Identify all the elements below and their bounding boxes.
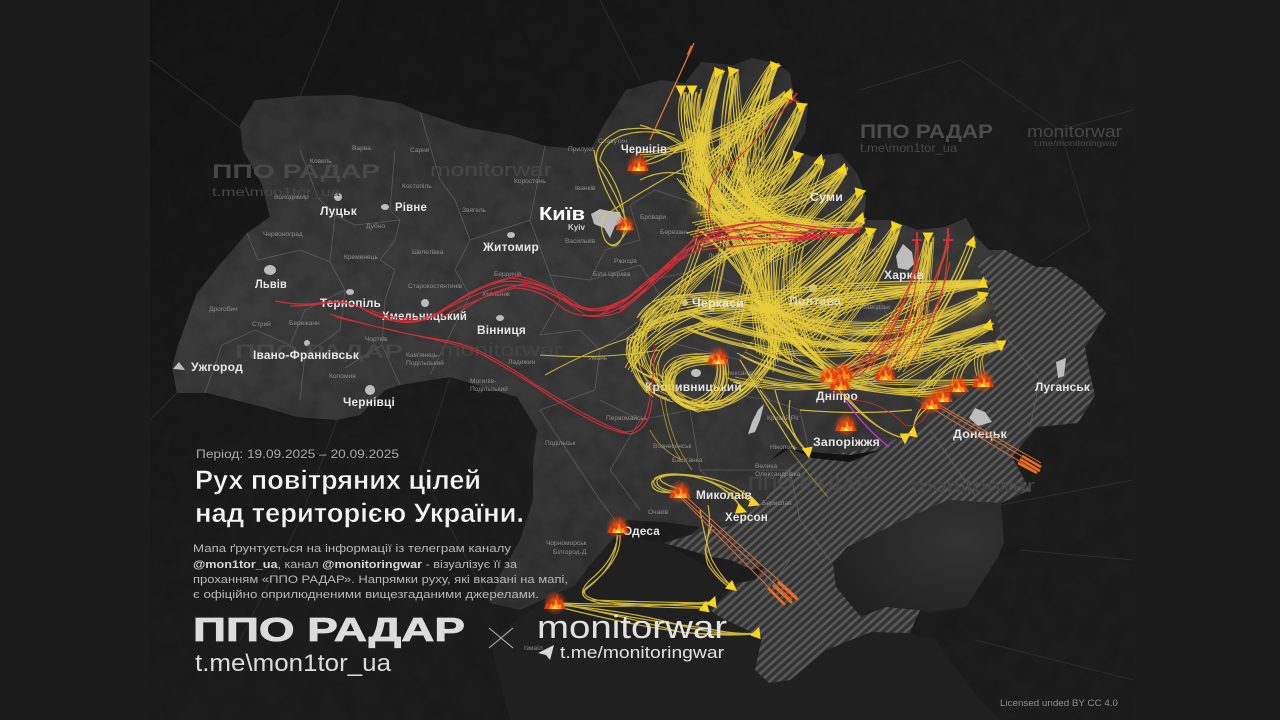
small town labels: Умань	[588, 355, 608, 362]
small town labels: Ладижин	[508, 359, 536, 366]
northern orange track	[650, 43, 694, 140]
tracks to Sumy border targets	[710, 157, 861, 310]
small town labels: Олександрівка	[755, 470, 801, 478]
brand: ППО РАДАР: ППО РАДАР	[193, 611, 465, 648]
western red bundle	[275, 222, 862, 322]
label: Миколаїв: Миколаїв	[696, 490, 752, 502]
label: Харків: Харків	[884, 270, 924, 282]
label: Полтава: Полтава	[789, 296, 841, 308]
label: Дніпро: Дніпро	[816, 391, 858, 403]
label: Kyiv: Kyiv	[568, 223, 585, 232]
small town labels: Ізмаїл	[524, 645, 543, 652]
purple track to Zaporizhzhia	[845, 400, 889, 447]
small town labels: Подільський	[470, 385, 508, 393]
yellow target arrowheads	[676, 60, 1006, 639]
small town labels: Бережани	[289, 320, 320, 327]
description text	[193, 543, 568, 601]
label: Рівне: Рівне	[395, 202, 427, 214]
Kyiv and Chernihiv loops	[594, 125, 700, 246]
small town labels: Звягель	[462, 207, 487, 214]
eastern red tracks	[835, 232, 950, 380]
watermark: monitorwar top right: monitorwar	[1027, 122, 1122, 141]
label: Хмельницький: Хмельницький	[382, 311, 467, 323]
label: Луцьк: Луцьк	[320, 206, 357, 218]
small town labels: Велика	[755, 463, 777, 470]
small town labels: Очаків	[648, 508, 669, 516]
watermark: centre-west: ППО РАДАР	[235, 342, 403, 363]
small town labels: Дрогобич	[209, 305, 238, 313]
Black Sea routes	[555, 535, 757, 635]
watermark: west: ППО РАДАР	[212, 162, 380, 183]
label: Кропивницький: Кропивницький	[645, 382, 742, 394]
label: Луганськ: Луганськ	[1035, 382, 1090, 394]
label: Вінниця: Вінниця	[477, 325, 526, 337]
watermark: centre-west monitorwar: monitorwar	[440, 340, 562, 360]
small town labels: Володимир	[274, 194, 309, 201]
city areas	[173, 193, 1066, 434]
label: Донецьк: Донецьк	[953, 429, 1007, 441]
small town labels: Ковель	[310, 158, 332, 165]
small town labels: Васильків	[565, 237, 596, 245]
brand: monitorwar: t.me/monitoringwar	[560, 643, 724, 662]
title: над територією України.	[195, 498, 524, 528]
small town labels: Заводськ	[862, 304, 890, 311]
thin red south of Dnipro	[850, 400, 932, 426]
watermark: south monitorwar: monitorwar	[912, 476, 1035, 496]
small town labels: Білгород-Д.	[553, 548, 588, 556]
Crimea ballistic lines	[680, 493, 797, 604]
olive faint tracks	[650, 395, 828, 497]
small town labels: Хмільник	[482, 290, 510, 298]
tracks to northern border targets	[640, 66, 801, 230]
southern red track	[330, 314, 654, 434]
Donetsk ballistic lines	[930, 403, 1041, 472]
small town labels: Подільський	[406, 359, 444, 367]
small town labels	[209, 138, 969, 652]
brand: monitorwar: monitorwar	[537, 609, 727, 645]
label: Одеса: Одеса	[623, 526, 660, 538]
small town labels: Нікополь	[770, 443, 798, 451]
small town labels: Червоноград	[263, 231, 303, 238]
watermarks	[212, 122, 1122, 496]
small town labels: Кременець	[344, 254, 378, 261]
routes: orange ballistic tracks	[650, 43, 1041, 605]
label: Чернігів: Чернігів	[621, 144, 667, 156]
panel: map background	[150, 0, 1133, 720]
tracks south of Dnipro	[740, 360, 935, 453]
small town labels: Баштанка	[672, 457, 703, 464]
small town labels: Славутич	[598, 138, 627, 145]
dense tracks	[628, 66, 1000, 410]
Mykolaiv loops and Kherson targets	[652, 474, 754, 588]
thick orange tips	[688, 46, 1041, 605]
small town labels: Конотоп	[745, 158, 770, 165]
thin western tracks	[540, 335, 660, 375]
small town labels: Стрий	[252, 320, 271, 328]
small town labels: Іванків	[575, 184, 596, 192]
small town labels: Березань	[660, 229, 690, 236]
title: Рух повітряних цілей	[195, 465, 481, 495]
map: territory of Ukraine	[150, 50, 1133, 683]
infographic canvas	[150, 0, 1133, 706]
small town labels: Могилів-	[470, 377, 496, 385]
explosions	[543, 153, 995, 615]
icon: telegram plane	[538, 645, 554, 660]
city labels	[191, 202, 1090, 538]
tracks through northern hub	[680, 120, 860, 250]
tracks to eastern targets	[690, 283, 1000, 395]
brand: ППО РАДАР	[193, 611, 465, 677]
small town labels: Ржищів	[614, 257, 637, 265]
small town labels: Подільськ	[545, 439, 576, 447]
small town labels: Костопіль	[402, 182, 432, 190]
watermark: west monitorwar: monitorwar	[430, 160, 552, 180]
small town labels: Первомайськ	[606, 414, 647, 422]
small town labels: Сарни	[410, 147, 430, 154]
hub vertical links	[695, 150, 815, 370]
label: Івано-Франківськ: Івано-Франківськ	[253, 350, 359, 362]
small town labels: Куп'янськ	[940, 283, 969, 290]
small town labels: Богодухів	[850, 246, 880, 254]
small town labels: Олександрія	[722, 369, 761, 377]
watermark: south: ППО РАДАР	[748, 474, 870, 495]
tracks into Dnipro strikes	[730, 300, 985, 395]
small town labels: Чортків	[365, 335, 388, 343]
tracks to Kharkiv border targets	[760, 229, 971, 380]
watermark: ППО РАДАР top right: ППО РАДАР	[860, 122, 993, 143]
small town labels: Кам'янець-	[406, 352, 440, 359]
label: Львів: Львів	[255, 279, 287, 291]
cross mark	[489, 628, 513, 648]
label: Житомир: Житомир	[482, 242, 539, 254]
label: Київ: Київ	[539, 204, 585, 224]
watermark: channel link top right: t.me\mon1tor_ua	[860, 141, 957, 155]
northern red track	[709, 97, 794, 232]
label: Черкаси: Черкаси	[692, 298, 744, 310]
routes: red missile tracks	[275, 93, 953, 434]
licence note: Licensed unded BY CC 4.0	[1000, 698, 1118, 708]
label: Чернівці: Чернівці	[343, 397, 395, 409]
title	[195, 465, 524, 528]
routes: yellow flight tracks	[540, 63, 1005, 635]
routes: yellow density haze	[700, 205, 985, 345]
small town labels: Старокостянтинів	[408, 282, 463, 290]
watermark: monitoringwar link: t.me/monitoringwar	[1034, 139, 1118, 148]
central hub to Cherkasy and western loops	[628, 232, 800, 400]
small town labels: Лубни	[708, 252, 727, 260]
brand: monitorwar	[537, 609, 727, 662]
small town labels: Бердичів	[494, 270, 522, 278]
description text: Мапа ґрунтується на інформації із телеграм каналу	[193, 543, 512, 555]
small town labels: Кривий Ріг	[767, 414, 800, 422]
description text: є офіційно оприлюдненими вищезгаданими джерелами.	[193, 589, 539, 601]
occupied territories hatch	[664, 250, 1106, 683]
red arrowheads	[786, 93, 953, 250]
watermark: west link: t.me\mon1tor_ua	[212, 185, 340, 199]
label: Херсон: Херсон	[725, 512, 768, 524]
label: Суми: Суми	[810, 192, 843, 204]
labels drawn above the tracks	[621, 144, 924, 310]
Kropyvnytskyi loops	[629, 330, 776, 410]
label: Тернопіль: Тернопіль	[320, 298, 381, 310]
small town labels: Берислав	[762, 500, 792, 507]
small town labels: Бровари	[640, 214, 666, 221]
small town labels: Дубно	[366, 222, 385, 230]
label: Ужгород: Ужгород	[191, 362, 244, 374]
small town labels: Коростень	[514, 178, 546, 185]
dense track copies	[625, 63, 1005, 412]
description text: проханням «ППО РАДАР». Напрямки руху, які вказані на мапі,	[193, 574, 568, 586]
description text: @mon1tor_ua , канал @monitoringwar - візуалізує її за	[193, 559, 518, 571]
small town labels: Прилуки	[568, 146, 594, 153]
small town labels: Біла Церква	[593, 270, 631, 278]
small town labels: Вознесенськ	[653, 443, 692, 450]
small town labels: Коломия	[329, 373, 356, 380]
small town labels: Чорноморськ	[546, 540, 587, 547]
brand: ППО РАДАР: t.me\mon1tor_ua	[195, 650, 392, 677]
small town labels: Шепетівка	[412, 248, 444, 256]
period: Період: 19.09.2025 – 20.09.2025	[196, 447, 399, 461]
label: Запоріжжя: Запоріжжя	[813, 437, 880, 449]
small town labels: Варва	[352, 145, 371, 152]
